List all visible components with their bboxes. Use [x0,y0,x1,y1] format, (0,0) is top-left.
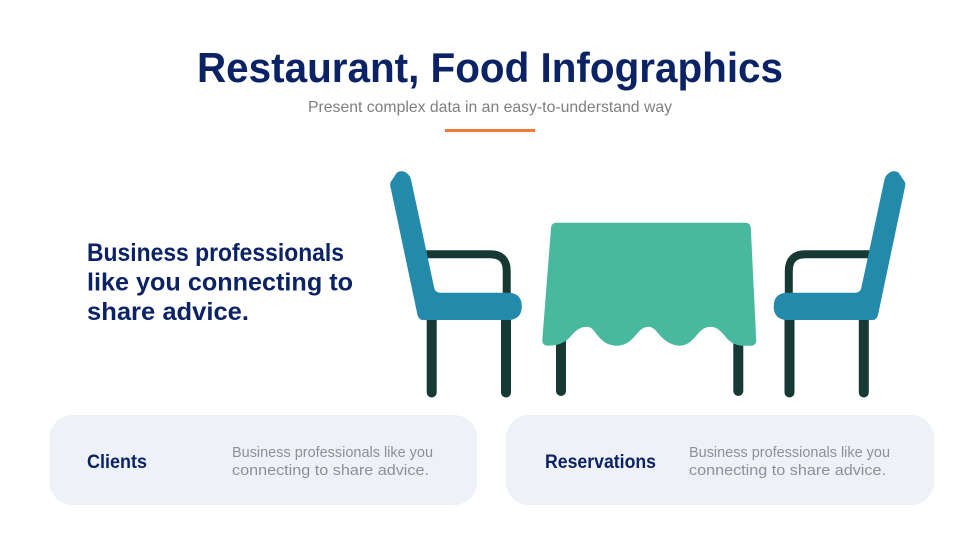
reservations description [689,444,890,479]
title: Restaurant, Food Infographics [197,44,783,91]
left heading text: like you connecting to [87,268,353,296]
clients description: connecting to share advice. [232,462,429,479]
clients description: Business professionals like you [232,444,433,461]
panel: clients [50,415,477,505]
orange accent rule [445,129,535,132]
icon: left chair [390,171,522,392]
left heading text: Business professionals [87,239,344,267]
icon: table [542,223,756,391]
left heading text [87,239,353,326]
icon: right chair [774,171,905,392]
clients label: Clients [87,452,147,473]
reservations label: Reservations [545,452,656,473]
panel: reservations [506,415,934,505]
reservations description: Business professionals like you [689,444,890,461]
clients description [232,444,433,479]
subtitle: Present complex data in an easy-to-understand way [308,99,672,116]
reservations description: connecting to share advice. [689,462,886,479]
left heading text: share advice. [87,298,249,326]
